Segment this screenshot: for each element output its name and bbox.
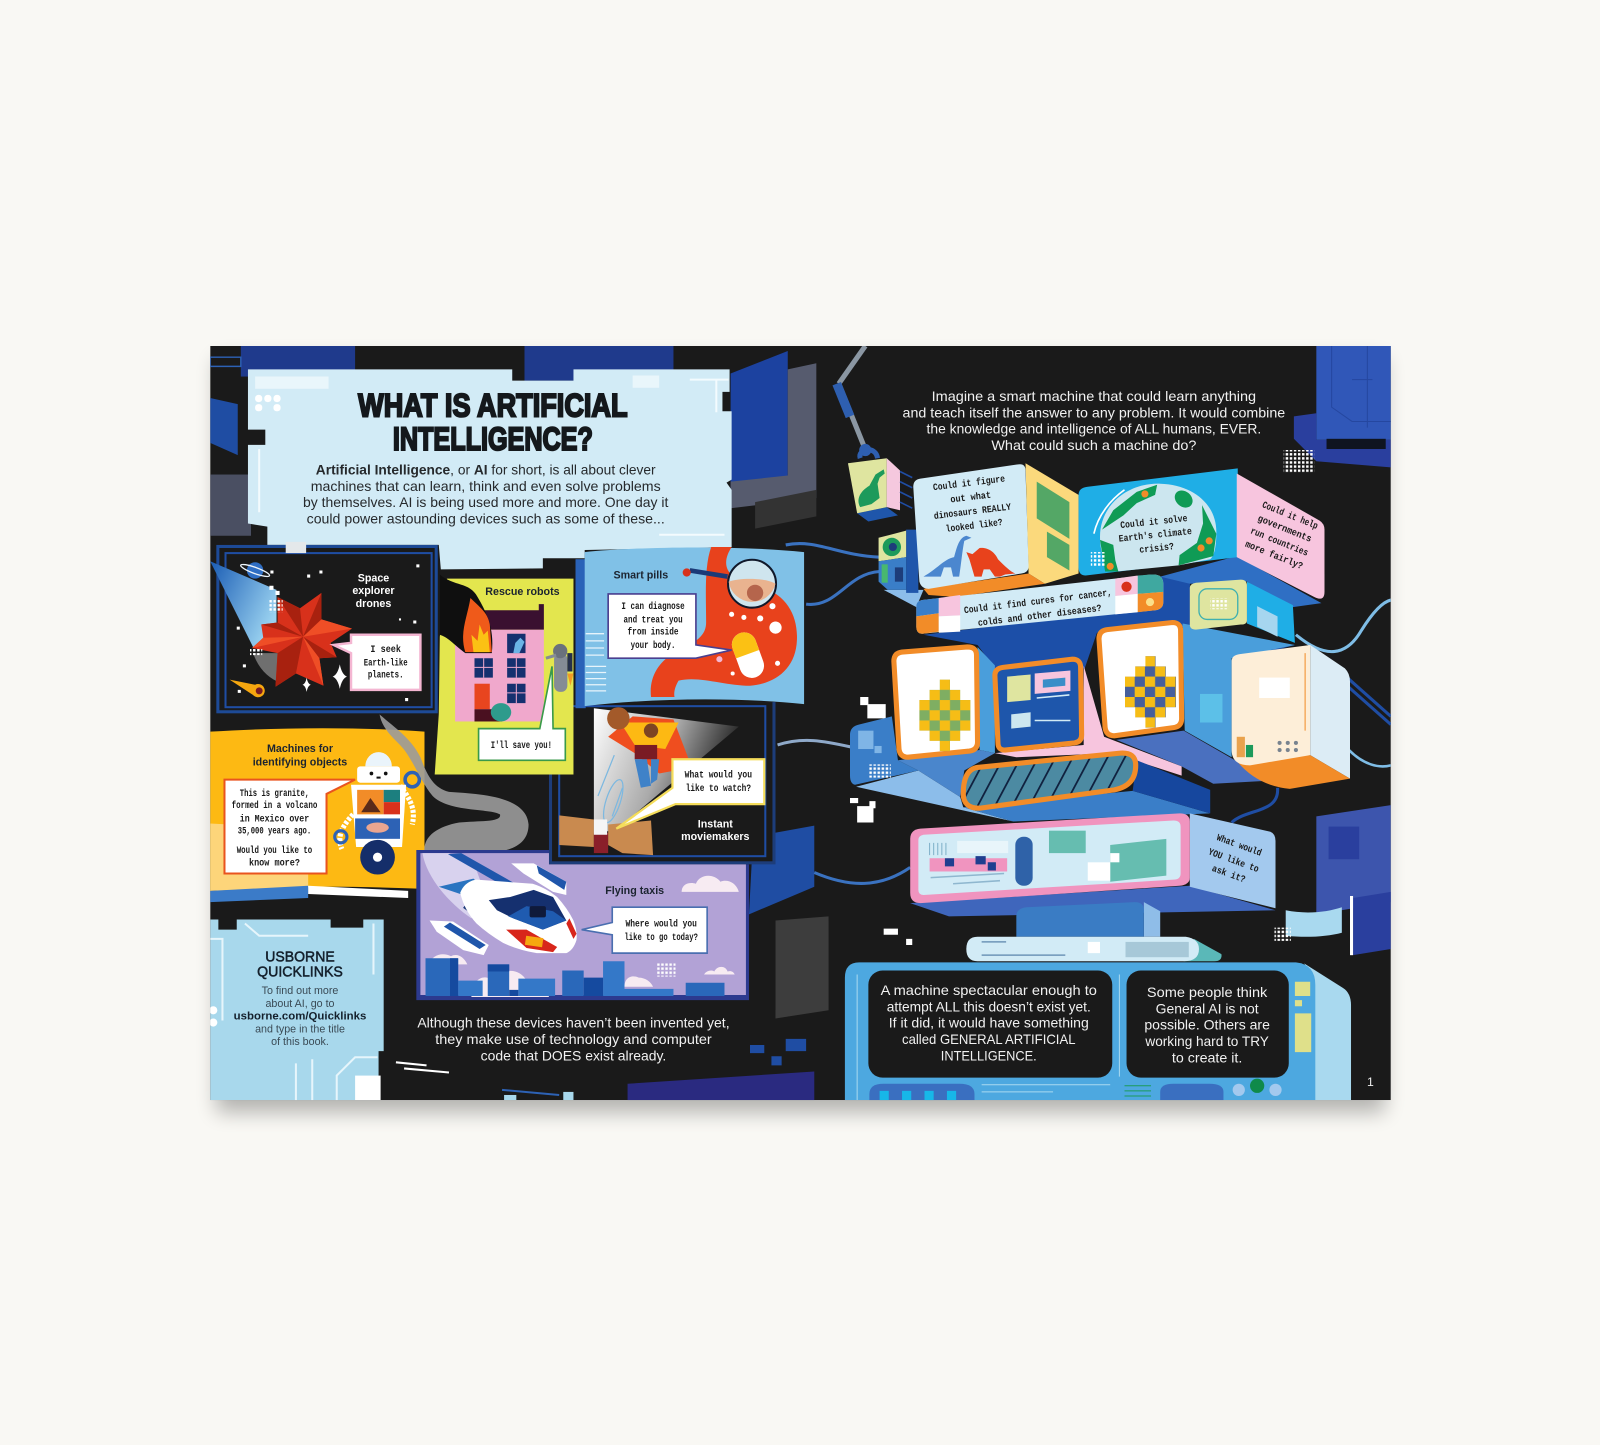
panel: flying taxis	[416, 850, 749, 1000]
label: instant moviemakers	[682, 820, 749, 840]
taxi cockpit	[489, 890, 566, 930]
box: cream module	[1232, 645, 1350, 789]
speech bubble: watch	[616, 759, 764, 829]
screen: control panel card	[995, 659, 1082, 750]
speech bubble: granite: 35,000 years ago.	[238, 826, 311, 837]
text: quicklinks: of this book.	[271, 1036, 329, 1048]
intro paragraph: Artificial Intelligence, or AI for short, is all about clever	[316, 463, 656, 478]
machine: pink lower console: YOU like to	[1207, 847, 1260, 875]
panel: climate question: Earth's climate	[1118, 526, 1193, 545]
panel: climate question: crisis?	[1139, 541, 1175, 556]
panel: usborne quicklinks	[209, 919, 384, 1100]
panel: space explorer drones	[210, 542, 438, 713]
icon: rescue robot	[546, 644, 573, 692]
heading: INTELLIGENCE?	[393, 420, 593, 457]
label: instant moviemakers: moviemakers	[681, 831, 750, 843]
machine: pink lower console	[910, 813, 1276, 916]
smoke trail	[380, 714, 529, 853]
icon: dots	[657, 963, 676, 977]
background blocks: left page	[210, 346, 910, 1100]
speech bubble: watch: What would you	[685, 770, 752, 781]
text box: some people: working hard to TRY	[1144, 1034, 1269, 1049]
machine: pink lower console: What would	[1215, 832, 1263, 859]
speech bubble: granite: know more?	[249, 857, 300, 868]
text: imagine: What could such a machine do?	[991, 438, 1197, 453]
screen: green pattern card	[894, 647, 978, 757]
label: space explorer drones: explorer	[352, 585, 395, 597]
panel: governments question: more fairly?	[1243, 539, 1304, 572]
panel: governments question: Could it help	[1260, 499, 1320, 532]
panel: governments question: governments	[1256, 513, 1313, 545]
label: space explorer drones: drones	[356, 598, 391, 610]
taxi body	[460, 880, 577, 953]
speech bubble: granite: This is granite,	[240, 788, 309, 799]
panel: climate question: Could it solve	[1120, 513, 1188, 531]
panel: governments question	[1237, 474, 1324, 599]
grille	[963, 753, 1136, 808]
text box: general intelligence: A machine spectacular enough to	[881, 983, 1097, 998]
speech bubble: diagnose: I can diagnose	[621, 601, 685, 612]
taxi red stripe	[506, 930, 557, 952]
icon: magnifier	[683, 560, 776, 608]
intro paragraph: by themselves. AI is being used more and more. One day it	[303, 495, 669, 510]
panel: dinosaurs question	[913, 463, 1079, 597]
icon: red star drone	[252, 593, 352, 687]
taxi upper pod	[511, 863, 566, 895]
background blocks: right page	[850, 346, 1391, 955]
speech bubble: go today: like to go today?	[624, 932, 698, 943]
panel: machines for identifying objects	[210, 728, 424, 902]
book spread	[209, 346, 1391, 1100]
icon: robot	[335, 752, 419, 875]
intro paragraph	[303, 463, 669, 527]
label: space explorer drones: Space	[358, 573, 389, 585]
taxi tail	[439, 879, 485, 895]
panel: dinosaurs question: dinosaurs REALLY	[933, 502, 1012, 522]
machine: body blocks	[850, 530, 1321, 821]
intro paragraph: could power astounding devices such as some of these...	[307, 512, 665, 527]
speech bubble: save you: I'll save you!	[491, 740, 552, 751]
label: flying taxis: Flying taxis	[605, 885, 664, 897]
heading: quicklinks	[257, 949, 343, 981]
text box: some people: General AI is not	[1156, 1001, 1259, 1016]
panel: dinosaurs question: Could it figure	[932, 474, 1006, 493]
label: machines	[253, 743, 347, 768]
text box: general intelligence: attempt ALL this doesn’t exist yet.	[887, 999, 1091, 1014]
text box: some people: possible. Others are	[1144, 1018, 1270, 1033]
label: instant moviemakers: Instant	[698, 819, 733, 831]
panel: dinosaurs question: out what	[950, 490, 992, 506]
heading: quicklinks: USBORNE	[265, 949, 335, 965]
heading	[357, 392, 628, 452]
taxi lower pod	[430, 920, 489, 955]
text: quicklinks: about AI, go to	[265, 998, 335, 1010]
text box: general intelligence: If it did, it would have something	[889, 1016, 1089, 1031]
label: machines: identifying objects	[253, 756, 347, 768]
clouds	[429, 876, 739, 997]
label: space explorer drones	[352, 574, 394, 607]
book shadow	[216, 359, 1385, 1112]
text: imagine: the knowledge and intelligence of ALL humans, EVER.	[927, 422, 1261, 437]
text: quicklinks: To find out more	[262, 985, 338, 997]
panel: diseases question: colds and other diseases?	[977, 603, 1102, 629]
label: machines: Machines for	[267, 743, 333, 755]
panel: climate question	[1079, 468, 1238, 576]
icon: sparkles	[303, 664, 347, 692]
icon: stomach sparkles	[716, 603, 782, 676]
text: imagine: Imagine a smart machine that could learn anything	[932, 389, 1256, 404]
panel: dinosaurs question: looked like?	[945, 517, 1003, 535]
text: quicklinks	[234, 985, 366, 1048]
speech bubble: granite	[224, 780, 355, 874]
panel: rescue robots	[435, 575, 573, 775]
text box: general intelligence: INTELLIGENCE.	[941, 1048, 1037, 1063]
icon: earth globe	[1091, 484, 1216, 571]
icon: robot arm	[837, 346, 871, 456]
speech bubble: save you	[479, 666, 565, 760]
text: quicklinks: and type in the title	[255, 1024, 345, 1036]
icon: smiling pill	[732, 632, 764, 678]
icon: comet trail	[210, 561, 277, 647]
intro paragraph: machines that can learn, think and even solve problems	[311, 479, 661, 494]
text: imagine: and teach itself the answer to any problem. It would combine	[903, 405, 1286, 420]
speech bubble: go today	[582, 907, 707, 953]
icon: wrist and hand	[559, 815, 653, 855]
box: small side modules	[879, 531, 906, 590]
caption: devices	[417, 1016, 730, 1063]
speech bubble: diagnose: your body.	[631, 640, 676, 651]
taxi wing	[448, 853, 515, 890]
panel: bottom console	[845, 962, 1351, 1100]
caption: devices: code that DOES exist already.	[481, 1048, 666, 1063]
screen: blue pattern card	[1099, 622, 1182, 736]
caption: devices: Although these devices haven’t been invented yet,	[417, 1016, 730, 1031]
projector beam	[594, 708, 739, 834]
panel: diseases question	[916, 574, 1163, 634]
speech bubble: watch: like to watch?	[686, 783, 751, 794]
buildings	[426, 958, 724, 996]
speech bubble: diagnose: and treat you	[623, 614, 683, 625]
icon: grey dust	[253, 653, 278, 682]
icon: small comet	[230, 680, 265, 697]
icon: house	[455, 604, 544, 721]
text box: general intelligence	[868, 970, 1112, 1078]
panel: governments question: run countries	[1249, 526, 1310, 559]
icon: flying taxi	[422, 853, 577, 955]
speech bubble: planets: planets.	[368, 670, 404, 681]
icon: flying hero	[607, 707, 692, 788]
machine: stand	[1016, 902, 1160, 937]
icon: planet	[240, 562, 271, 579]
text: imagine	[903, 389, 1286, 453]
machine: supercomputer tower	[845, 450, 1351, 1100]
machine: pink lower console: ask it?	[1210, 863, 1247, 885]
label: rescue robots: Rescue robots	[485, 586, 560, 598]
taxi trail	[422, 853, 485, 918]
box: right green module	[1190, 580, 1295, 643]
speech bubble: granite: formed in a volcano	[232, 800, 317, 811]
icon: flames	[463, 598, 492, 652]
machine: keyboard	[966, 937, 1222, 961]
speech bubble: granite: Would you like to	[237, 845, 312, 856]
speech bubble: diagnose	[608, 594, 732, 658]
text box: some people: to create it.	[1172, 1050, 1242, 1065]
icon: smoke	[440, 575, 492, 653]
icon: dinosaurs	[923, 536, 1015, 577]
caption: devices: they make use of technology and computer	[435, 1032, 712, 1047]
speech bubble: planets: Earth-like	[364, 657, 408, 668]
panel: instant moviemakers	[549, 702, 776, 864]
speech bubble: diagnose: from inside	[628, 627, 679, 638]
text box: some people	[1127, 970, 1289, 1078]
speech bubble: planets: I seek	[370, 644, 401, 655]
panel: smart pills	[576, 547, 804, 708]
icon: stomach	[651, 547, 797, 697]
text: quicklinks: usborne.com/Quicklinks	[234, 1010, 366, 1022]
panel: diseases question: Could it find cures for cancer,	[963, 587, 1113, 616]
panel: title	[248, 369, 732, 569]
speech bubble: go today: Where would you	[626, 919, 697, 930]
speech bubble: granite: in Mexico over	[240, 813, 309, 824]
heading: quicklinks: QUICKLINKS	[257, 965, 343, 981]
text box: some people: Some people think	[1147, 985, 1267, 1000]
label: smart pills: Smart pills	[613, 570, 668, 582]
page number: 1	[1367, 1075, 1374, 1089]
text box: general intelligence: called GENERAL ARTIFICIAL	[902, 1032, 1076, 1047]
heading: WHAT IS ARTIFICIAL	[358, 386, 628, 423]
speech bubble: planets	[334, 635, 420, 690]
box: dinosaur module	[848, 450, 912, 521]
